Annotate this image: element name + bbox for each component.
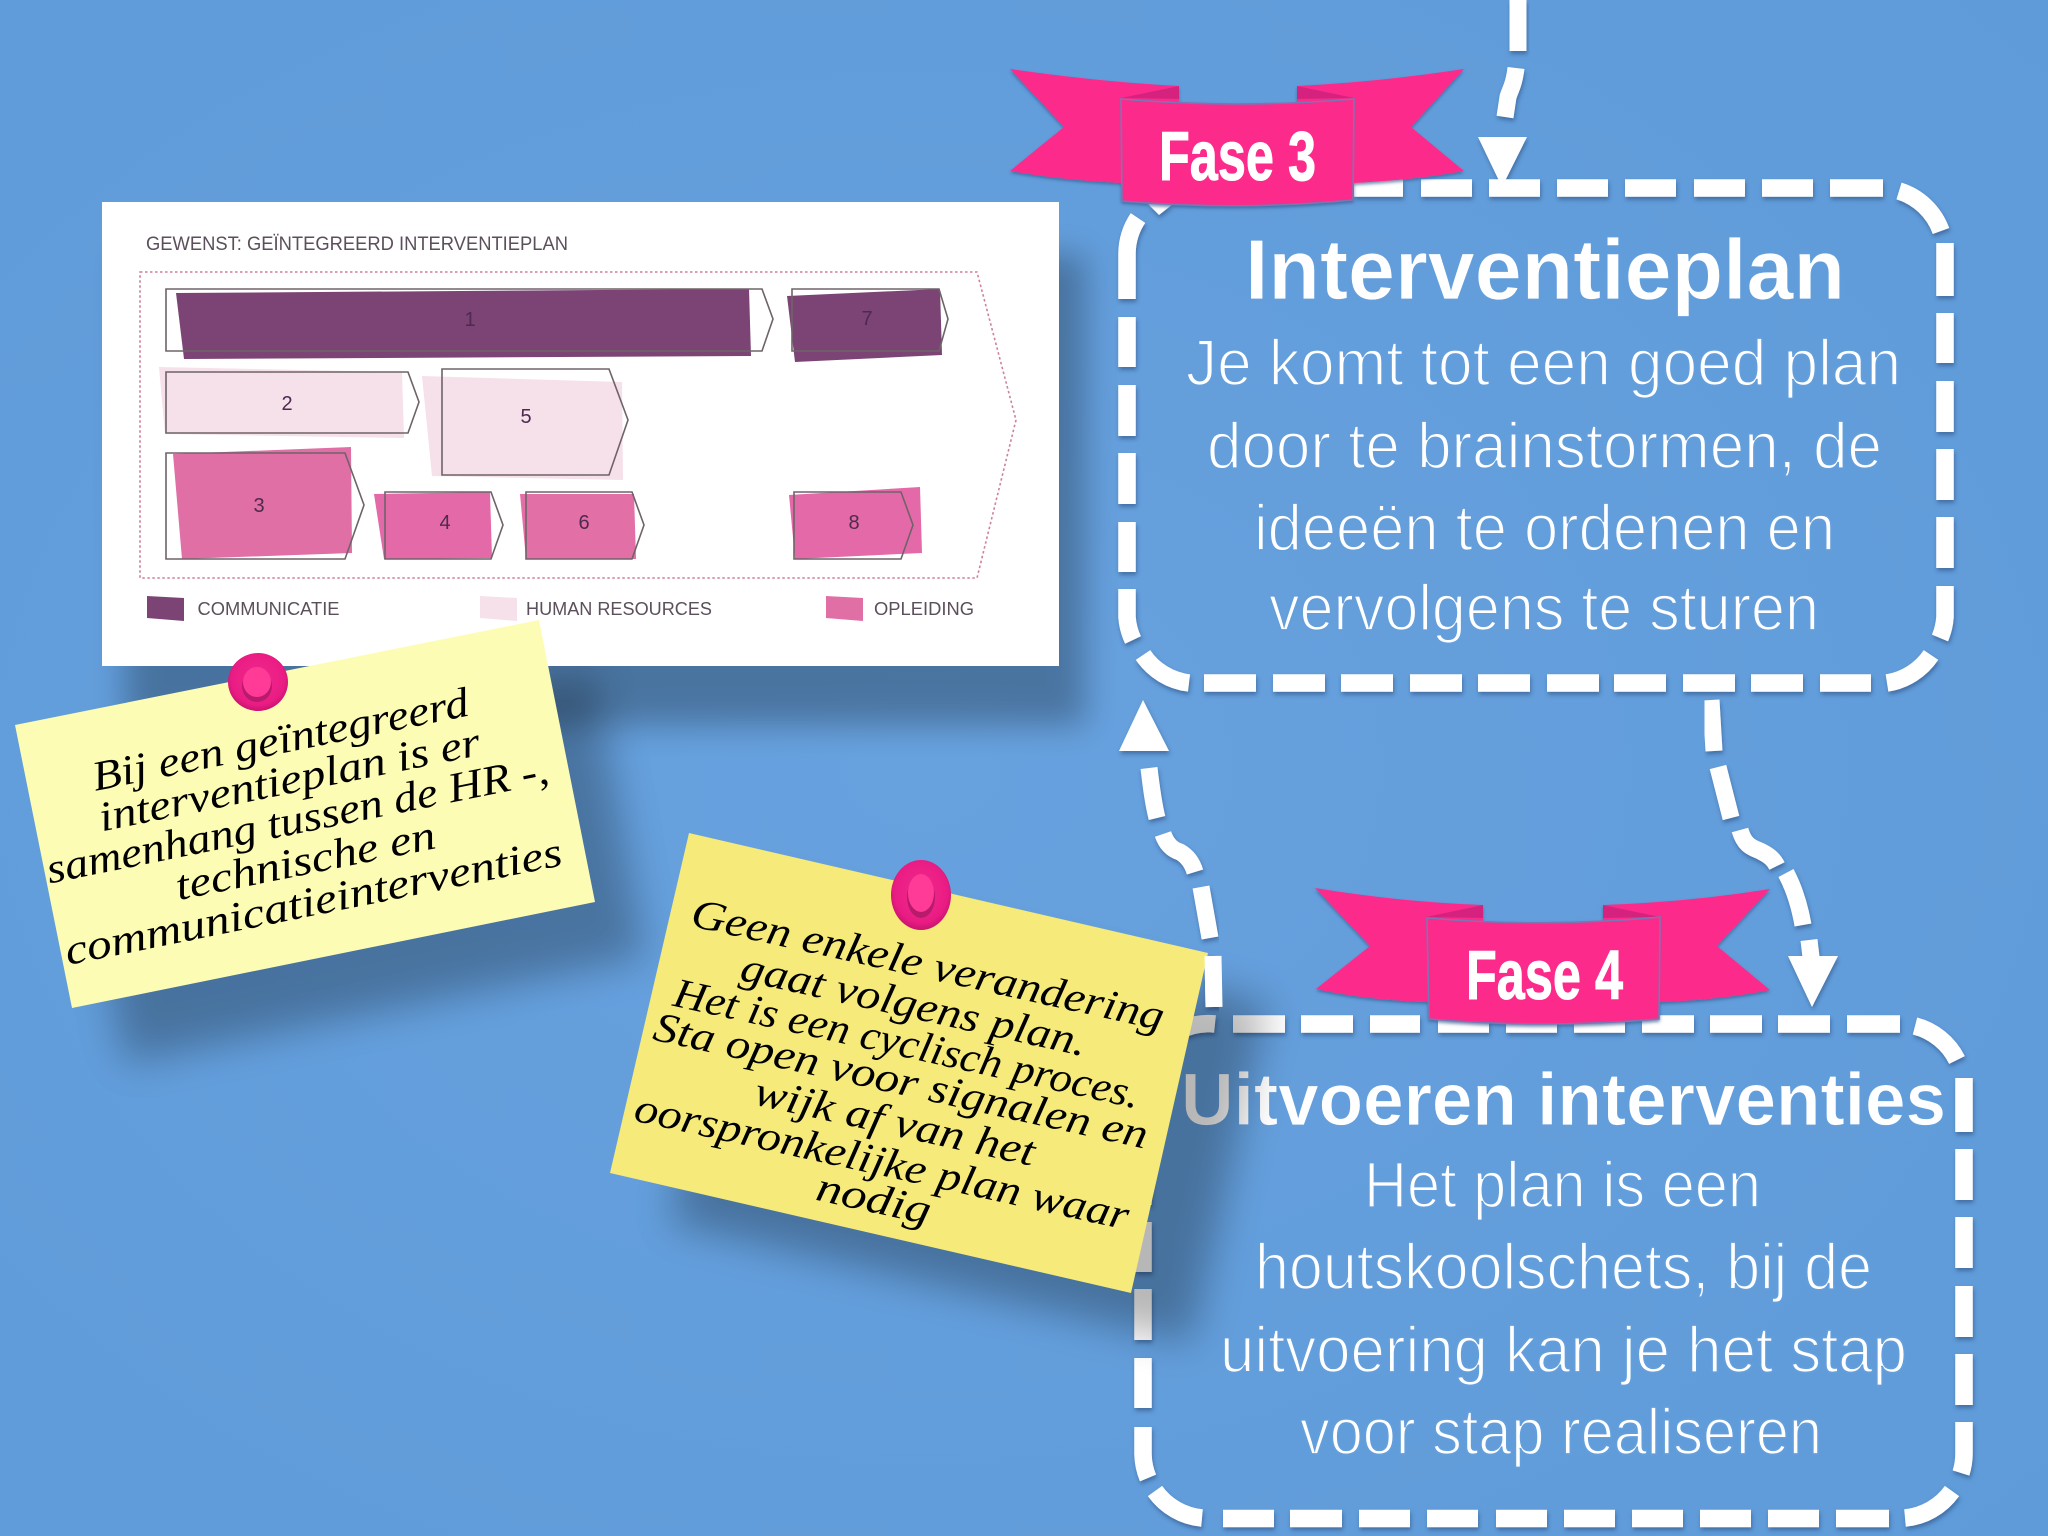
shadow: chart panel [125,255,1085,725]
note 1 text: samenhang tussen de HR -, [42,747,552,893]
heading: Interventieplan [1245,223,1845,318]
shadow: note 1 [70,675,645,1063]
sticky note 2 [610,833,1208,1293]
note 2 text: gaat volgens plan. [737,945,1091,1066]
note 2 text: Geen enkele verandering [687,891,1169,1040]
chart title: GEWENST: GEÏNTEGREERD INTERVENTIEPLAN [146,234,568,255]
bar 6: 6 [578,512,590,534]
dashed box: phase 4 [1143,1024,1964,1518]
dash overlapping note corner [1213,956,1214,1007]
body text: Het plan is een [1364,1148,1761,1221]
legend: opleiding: OPLEIDING [874,599,974,619]
note 1 text: technische en [171,813,439,910]
legend: human resources: HUMAN RESOURCES [526,599,712,619]
body text: door te brainstormen, de [1207,409,1882,482]
legend: opleiding [826,596,974,621]
bar 1 [166,289,773,359]
legend: human resources [480,596,712,621]
bar 1: 1 [464,309,476,331]
bar 6 [520,492,644,559]
body text: uitvoering kan je het stap [1220,1313,1907,1386]
legend: communicatie: COMMUNICATIE [198,599,340,619]
shadow: note 2 [670,883,1268,1343]
note 2 text: wijk af van het [750,1069,1041,1176]
note 1 text: interventieplan is er [95,719,485,841]
dotted timeline arrow [140,272,1016,578]
body text: houtskoolschets, bij de [1255,1230,1872,1303]
bar 7: 7 [861,308,873,330]
note 2 text [630,891,1169,1240]
note 2 text: nodig [812,1164,935,1234]
body text: Je komt tot een goed plan [1186,326,1901,399]
dashed arrow from phase 3 to phase 4 [1711,700,1838,1007]
banner: Fase 3 [1010,69,1464,206]
bar 7 [787,289,948,362]
sticky note 1 [15,620,595,1008]
bar 2 [159,367,419,438]
note 2 text: Sta open voor signalen en [649,1004,1152,1158]
note 1 text: Bij een geïntegreerd [88,680,474,801]
body text: voor stap realiseren [1300,1395,1822,1468]
dashed box: phase 3 [1127,188,1945,683]
heading: Uitvoeren interventies [1181,1058,1946,1141]
banner label: Fase 4 [1466,936,1623,1014]
bar 8: 8 [848,512,860,534]
bar 8 [789,487,922,559]
panel: integrated intervention plan chart [102,202,1059,666]
dashed arrow from phase 4 back to phase 3 [1119,700,1214,1007]
note 1 text: communicatieinterventies [61,830,566,975]
note 2 text: oorspronkelijke plan waar [630,1085,1134,1240]
bar 4: 4 [439,512,451,534]
banner label: Fase 3 [1159,117,1316,195]
bar 5: 5 [520,406,532,428]
body text [1220,1148,1907,1468]
dashed arrow into phase 3 [1478,0,1527,187]
note 2 text: Het is een cyclisch proces. [668,970,1144,1118]
icon: pin 1 [228,653,288,711]
text block: phase 3 [1186,223,1901,644]
body text: vervolgens te sturen [1269,571,1819,644]
icon: pin 2 [891,860,951,930]
text block: phase 4 [1181,1058,1946,1468]
bar 3 [166,447,364,559]
bar 2: 2 [281,393,293,415]
banner: Fase 4 [1315,888,1770,1024]
bar 4 [374,492,503,559]
body text: ideeën te ordenen en [1254,491,1835,564]
bar 3: 3 [253,495,265,517]
bar 5 [422,369,628,480]
body text [1186,326,1901,644]
legend: communicatie [147,596,340,621]
note 1 text [42,680,566,975]
